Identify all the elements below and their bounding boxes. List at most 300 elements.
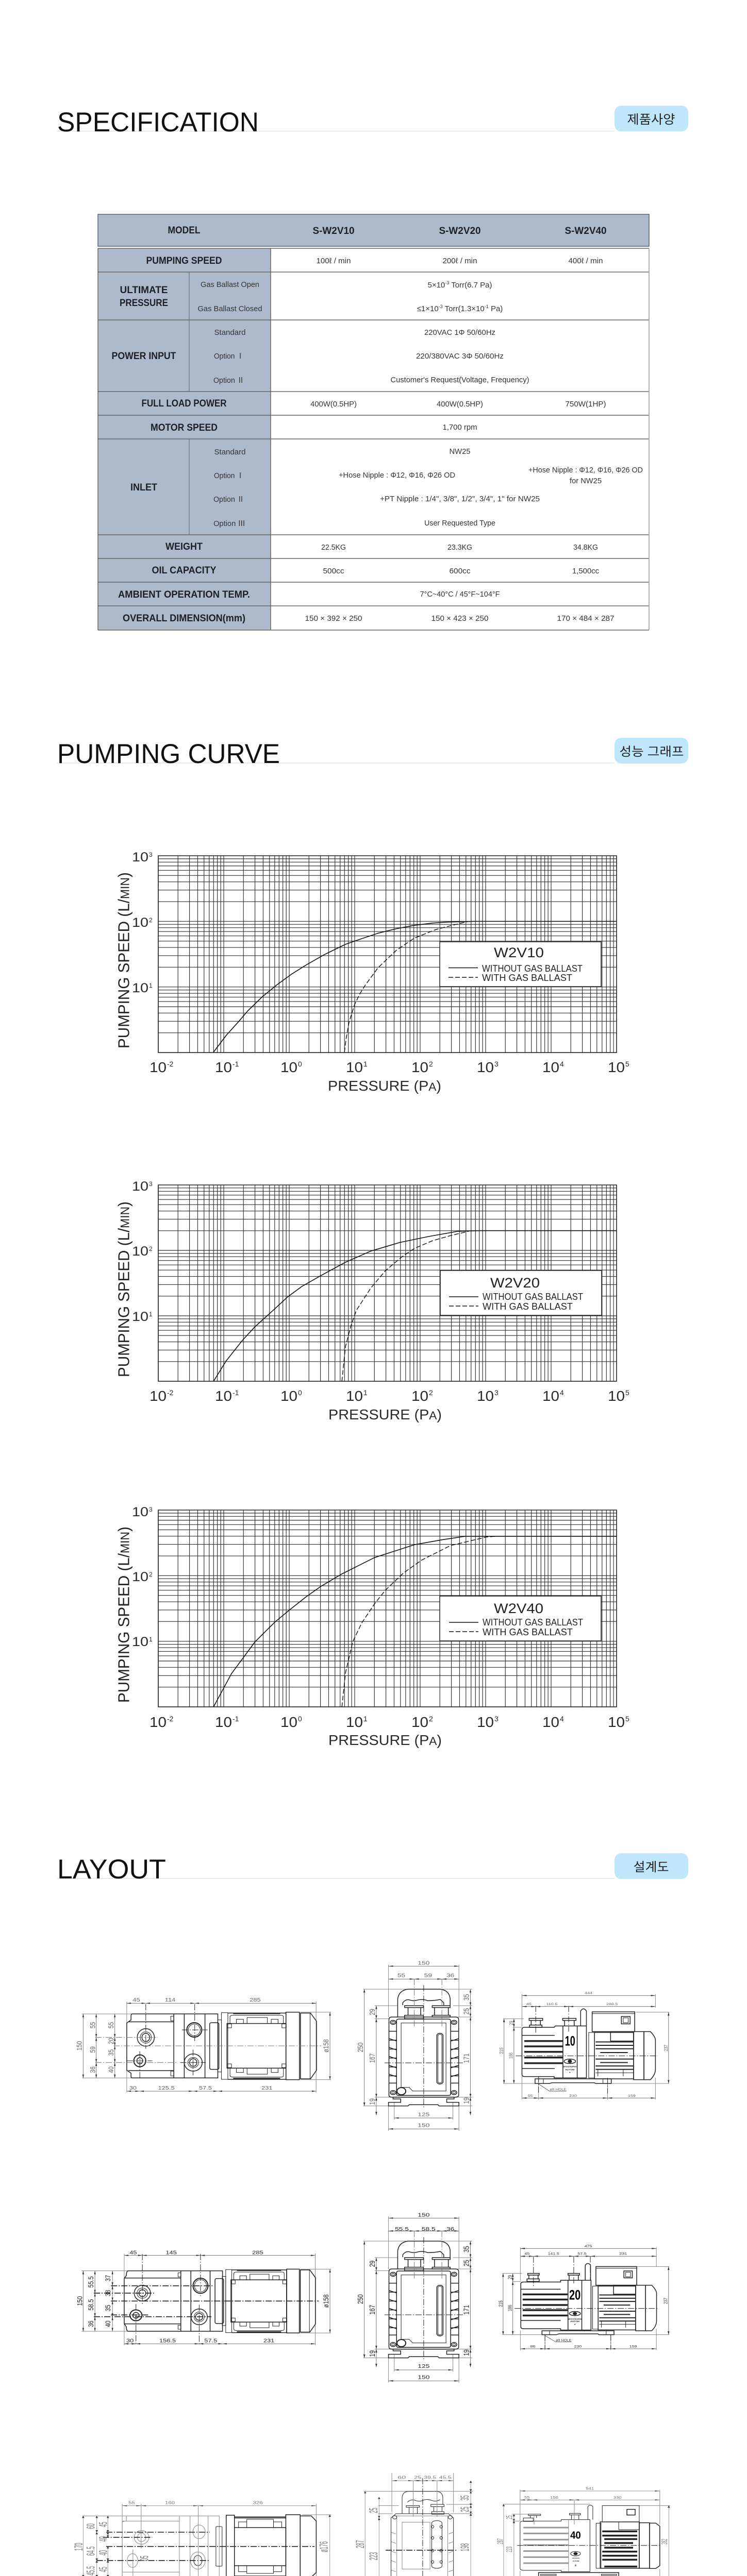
- x axis W2V40: 2: [429, 1715, 433, 1723]
- x axis W2V20: 10: [411, 1388, 428, 1404]
- drawing: W2V20 top view: 38: [104, 2290, 112, 2296]
- drawing: W2V10 top view: [75, 1997, 331, 2093]
- drawing: W2V40 top view: ø176: [318, 2541, 330, 2552]
- row: oil capacity: 1,500cc: [572, 567, 599, 575]
- legend W2V10: W2V10: [494, 945, 544, 960]
- x axis W2V20: 5: [625, 1388, 629, 1397]
- y axis W2V20: 10: [132, 1244, 148, 1259]
- x axis W2V20: 10: [346, 1388, 363, 1404]
- drawing: W2V40 front view: 60: [397, 2476, 406, 2480]
- drawing: W2V20 top view: 40: [104, 2320, 112, 2327]
- x axis W2V20: 2: [429, 1388, 433, 1397]
- row: pumping speed: 200ℓ / min: [442, 257, 477, 265]
- row: oil capacity: 600cc: [450, 567, 471, 575]
- drawing: W2V10 side view: 186: [508, 2053, 514, 2059]
- drawing: W2V10 front view: 59: [424, 1972, 432, 1978]
- legend W2V20: W2V20: [490, 1275, 540, 1291]
- drawing: W2V20 front view: 250: [356, 2294, 364, 2304]
- row: full load power: [141, 398, 606, 409]
- x axis W2V40: 4: [560, 1715, 564, 1723]
- drawing: W2V10 top view: 55: [107, 2022, 115, 2028]
- heading: specification: 제품사양: [627, 113, 675, 127]
- drawing: W2V40 front view: 25: [414, 2476, 422, 2480]
- row: model: [168, 225, 606, 236]
- drawing: W2V40 top view: 45.5: [85, 2566, 97, 2575]
- row: motor speed: 1,700 rpm: [442, 423, 477, 432]
- drawing: W2V20 front view: 167: [368, 2305, 376, 2315]
- drawing: W2V10 side view: 237: [663, 2045, 669, 2051]
- drawing: W2V20 side view: 86: [530, 2345, 536, 2348]
- row: ambient operation temp: AMBIENT OPERATION TEMP.: [118, 589, 250, 600]
- drawing: W2V40 front view: 45.5: [439, 2476, 452, 2480]
- x axis W2V10: 5: [625, 1060, 629, 1068]
- y axis W2V20: PUMPING SPEED (L/MIN): [114, 1201, 133, 1377]
- row: model: S-W2V40: [565, 226, 606, 236]
- chart: W2V20 pumping curve: [114, 1179, 629, 1422]
- row: weight: 23.3KG: [447, 543, 472, 552]
- x axis W2V40: 1: [363, 1715, 368, 1723]
- y axis W2V20: 2: [149, 1245, 153, 1252]
- drawing: W2V10 front view: 150: [418, 2122, 430, 2128]
- drawing: W2V10 top view: 231: [261, 2085, 273, 2091]
- row: power input: [111, 328, 529, 385]
- heading: layout: 설계도: [633, 1860, 669, 1874]
- legend W2V40: WITH GAS BALLAST: [483, 1627, 573, 1637]
- drawing: W2V40 front view: 25: [459, 2506, 471, 2512]
- x axis W2V10: 10: [215, 1059, 232, 1075]
- y axis W2V10: [114, 850, 153, 1048]
- drawing: W2V10 top view: 35: [107, 2049, 115, 2056]
- drawing: W2V20 top view: [75, 2249, 331, 2345]
- drawing: W2V20 top view: 156.5: [159, 2338, 176, 2344]
- x axis W2V10: 2: [429, 1060, 433, 1068]
- x axis W2V40: 10: [346, 1714, 363, 1730]
- drawing: W2V10 front view: 35: [462, 1994, 471, 2001]
- row: ultimate pressure: Gas Ballast Open: [201, 280, 259, 289]
- drawing: W2V10 front view: 25: [462, 2008, 471, 2014]
- drawing: W2V20 front view: 19: [368, 2350, 376, 2357]
- y axis W2V10: PUMPING SPEED (L/MIN): [114, 872, 133, 1048]
- drawing: W2V40 top view: 45: [97, 2567, 110, 2572]
- y axis W2V20: 1: [149, 1311, 153, 1318]
- heading: pumping curve: PUMPING CURVE: [57, 739, 280, 769]
- row: ultimate pressure: ULTIMATE: [120, 285, 168, 296]
- x axis W2V20: 1: [363, 1388, 368, 1397]
- x axis W2V10: [150, 1059, 629, 1094]
- row: overall dimension: OVERALL DIMENSION(mm): [123, 613, 245, 624]
- drawing: W2V20 top view: 150: [75, 2296, 84, 2306]
- drawing: W2V10 front view: 150: [418, 1960, 430, 1966]
- y axis W2V10: 2: [149, 917, 153, 924]
- drawing: W2V40 side view: 25: [505, 2515, 514, 2519]
- x axis W2V20: 4: [560, 1388, 564, 1397]
- drawing: W2V40 side view: 287: [495, 2538, 505, 2544]
- drawing: W2V10 top view: 114: [165, 1997, 176, 2003]
- heading: layout: LAYOUT: [57, 1854, 166, 1885]
- drawing: W2V20 front view: 19: [462, 2349, 471, 2356]
- row: inlet: Standard: [214, 448, 245, 456]
- drawing: W2V40 top view: 326: [253, 2501, 263, 2505]
- row: inlet: +Hose Nipple : Φ12, Φ16, Φ26 OD: [528, 466, 643, 474]
- row: overall dimension: [123, 613, 615, 624]
- row: inlet: for NW25: [570, 477, 602, 485]
- row: pumping speed: PUMPING SPEED: [146, 256, 222, 266]
- drawing: W2V10 side view: 45: [526, 2002, 532, 2006]
- y axis W2V20: [114, 1179, 153, 1377]
- drawing: W2V20 side view: 57.5: [577, 2252, 587, 2256]
- y axis W2V20: 3: [149, 1180, 153, 1188]
- drawing: W2V40 front view: 223: [368, 2552, 380, 2560]
- y axis W2V40: PUMPING SPEED (L/MIN): [114, 1527, 133, 1703]
- curves W2V10: [213, 921, 617, 1052]
- row: model: S-W2V10: [312, 226, 355, 236]
- drawing: W2V10 side view: ø9 HOLE: [550, 2088, 567, 2091]
- heading: layout: [57, 1853, 688, 1885]
- drawing: W2V20 side view: 475: [585, 2244, 592, 2248]
- x axis W2V10: 10: [346, 1059, 363, 1075]
- drawing: W2V10 side view: AUTOM: [565, 2069, 575, 2071]
- row: weight: [165, 541, 598, 552]
- drawing: W2V20 side view: 45: [524, 2252, 530, 2256]
- row: inlet: INLET: [130, 482, 157, 493]
- drawing: W2V40 side view: 156: [550, 2495, 558, 2500]
- drawing: W2V40 side view: 330: [613, 2495, 622, 2500]
- row: ambient operation temp: 7°C~40°C / 45°F~104°F: [420, 590, 500, 599]
- drawing: W2V40 front view: 287: [354, 2540, 367, 2548]
- drawing: W2V10 side view: 110.5: [546, 2002, 558, 2006]
- drawing: W2V40 side view: 223: [505, 2547, 514, 2552]
- row: ultimate pressure: -1: [485, 304, 489, 309]
- x axis W2V20: 10: [477, 1388, 494, 1404]
- x axis W2V40: 10: [411, 1714, 428, 1730]
- drawing: W2V10 top view: 30: [129, 2085, 137, 2091]
- drawing: W2V20 side view: AUTOM: [570, 2320, 580, 2323]
- drawing: W2V40 side view: AUTOM: [573, 2561, 579, 2562]
- drawing: W2V40 top view: [72, 2501, 331, 2576]
- x axis W2V20: 10: [542, 1388, 559, 1404]
- drawing: W2V20 front view: 29: [368, 2261, 376, 2267]
- drawing: W2V40 front view: 25: [368, 2507, 380, 2513]
- x axis W2V40: PRESSURE (PA): [328, 1732, 442, 1748]
- x axis W2V20: PRESSURE (PA): [328, 1406, 442, 1422]
- drawing: W2V10 front view: 19: [368, 2098, 376, 2105]
- drawing: W2V20 front view: 150: [418, 2374, 430, 2380]
- drawing: W2V10 top view: 36: [88, 2066, 97, 2073]
- x axis W2V40: 0: [298, 1715, 302, 1723]
- row: ambient operation temp: [118, 589, 500, 600]
- row: inlet: NW25: [450, 447, 470, 456]
- drawing: W2V10 side view: 159: [628, 2094, 636, 2098]
- drawing: W2V40 top view: 05: [138, 2555, 151, 2561]
- x axis W2V20: 10: [215, 1388, 232, 1404]
- x axis W2V20: -2: [167, 1388, 174, 1397]
- drawing: W2V10 side view: 215: [499, 2047, 504, 2054]
- row: inlet: +Hose Nipple : Φ12, Φ16, Φ26 OD: [339, 471, 455, 480]
- drawing: W2V20 side view: ø9 HOLE: [556, 2338, 571, 2342]
- y axis W2V10: 10: [132, 850, 148, 865]
- x axis W2V40: 3: [494, 1715, 499, 1723]
- row: ultimate pressure: Torr(1.3×10: [443, 304, 485, 313]
- legend W2V10: WITH GAS BALLAST: [482, 973, 572, 983]
- drawing: W2V20 top view: 231: [263, 2338, 274, 2344]
- x axis W2V10: -2: [167, 1060, 174, 1068]
- drawing: W2V20 front view: 150: [418, 2212, 430, 2218]
- drawing: W2V40 top view: 60: [85, 2523, 97, 2529]
- row: motor speed: [151, 422, 477, 433]
- row: ultimate pressure: -3: [439, 304, 443, 309]
- y axis W2V10: 10: [132, 981, 148, 995]
- row: pumping speed: 100ℓ / min: [317, 257, 351, 265]
- row: inlet: User Requested Type: [424, 519, 495, 528]
- row: motor speed: MOTOR SPEED: [151, 422, 218, 433]
- x axis W2V20: [150, 1388, 629, 1422]
- legend W2V10: [440, 942, 601, 987]
- legend W2V20: [440, 1270, 602, 1315]
- drawing: W2V40 front view: [354, 2473, 473, 2576]
- drawing: W2V40 side view: 40: [570, 2529, 581, 2541]
- row: power input: Option Ⅱ: [213, 376, 244, 385]
- row: ultimate pressure: [120, 280, 503, 313]
- legend W2V40: W2V40: [494, 1601, 543, 1616]
- drawing: W2V20 side view: 231: [619, 2252, 627, 2256]
- drawing: W2V40 front view: 198: [459, 2544, 471, 2551]
- drawing: W2V20 front view: 125: [418, 2363, 430, 2369]
- x axis W2V10: 10: [542, 1059, 559, 1075]
- x axis W2V10: 1: [363, 1060, 368, 1068]
- x axis W2V10: 4: [560, 1060, 564, 1068]
- row: power input: POWER INPUT: [111, 351, 176, 362]
- row: full load power: 400W(0.5HP): [437, 400, 483, 409]
- drawing: W2V10 front view: 36: [446, 1972, 455, 1978]
- drawing: W2V20 side view: 20: [569, 2287, 580, 2302]
- drawing: W2V10 side view: WOOSUNG: [563, 2065, 577, 2067]
- x axis W2V10: -1: [233, 1060, 239, 1068]
- row: ultimate pressure: ≤1×10: [417, 304, 439, 313]
- drawing: W2V20 top view: 35: [104, 2305, 112, 2311]
- drawing: W2V40 side view: 282: [660, 2539, 669, 2545]
- drawing: W2V10 top view: 57.5: [199, 2085, 212, 2091]
- x axis W2V10: PRESSURE (PA): [328, 1078, 441, 1094]
- x axis W2V40: 10: [150, 1714, 167, 1730]
- x axis W2V40: 5: [625, 1715, 629, 1723]
- drawing: W2V10 front view: 19: [462, 2097, 471, 2104]
- drawing: W2V10 top view: 40: [107, 2066, 115, 2073]
- x axis W2V10: 10: [280, 1059, 297, 1075]
- row: inlet: Option Ⅰ: [214, 471, 244, 480]
- drawing: W2V10 top view: 125.5: [158, 2085, 175, 2091]
- drawing: W2V10 top view: 150: [75, 2041, 84, 2050]
- row: power input: 220VAC 1Φ 50/60Hz: [424, 328, 495, 337]
- chart: W2V40 pumping curve: [114, 1505, 629, 1748]
- drawing: W2V10 front view: 125: [418, 2111, 430, 2117]
- row: oil capacity: 500cc: [323, 567, 344, 575]
- curves W2V20: [213, 1231, 617, 1381]
- x axis W2V10: 0: [298, 1060, 302, 1068]
- y axis W2V10: 3: [149, 851, 153, 858]
- x axis W2V40: 10: [542, 1714, 559, 1730]
- row: full load power: 400W(0.5HP): [310, 400, 357, 409]
- row: ultimate pressure: Pa): [489, 304, 503, 313]
- drawing: W2V20 front view: [356, 2212, 472, 2383]
- x axis W2V40: 10: [608, 1714, 625, 1730]
- row: pumping speed: 400ℓ / min: [568, 257, 603, 265]
- drawing: W2V20 top view: 30: [126, 2338, 134, 2344]
- drawing: W2V10 front view: [356, 1960, 472, 2131]
- drawing: W2V10 top view: 285: [250, 1997, 261, 2003]
- drawing: W2V10 front view: 250: [356, 2043, 364, 2052]
- drawing: W2V40 top view: 55: [128, 2501, 135, 2505]
- row: power input: 220/380VAC 3Φ 50/60Hz: [416, 352, 504, 361]
- row: inlet: [130, 447, 643, 528]
- drawing: W2V10 side view: 55: [528, 2094, 533, 2098]
- heading: specification: [57, 106, 688, 138]
- drawing: W2V20 top view: 45: [129, 2249, 137, 2256]
- drawing: W2V10 top view: 55: [88, 2022, 97, 2028]
- row: ultimate pressure: Gas Ballast Closed: [198, 304, 262, 313]
- drawing: W2V20 top view: 37: [104, 2275, 112, 2281]
- row: inlet: Option Ⅱ: [213, 495, 244, 504]
- y axis W2V40: [114, 1505, 153, 1703]
- row: full load power: 750W(1HP): [565, 400, 606, 409]
- drawing: W2V40 top view: 40: [97, 2536, 110, 2542]
- x axis W2V10: 3: [494, 1060, 499, 1068]
- drawing: W2V20 side view: 186: [507, 2305, 513, 2311]
- drawing: W2V10 side view: 29: [508, 2021, 514, 2025]
- y axis W2V40: 1: [149, 1636, 153, 1643]
- row: overall dimension: 150 × 423 × 250: [431, 614, 489, 623]
- x axis W2V40: 10: [280, 1714, 297, 1730]
- x axis W2V10: 10: [411, 1059, 428, 1075]
- row: weight: 22.5KG: [321, 543, 346, 552]
- drawing: W2V40 side view: WOOSUNG: [572, 2557, 579, 2559]
- x axis W2V40: -2: [167, 1715, 174, 1723]
- drawing: W2V10 top view: 45: [132, 1997, 140, 2003]
- drawing: W2V20 top view: 57.5: [204, 2338, 217, 2344]
- drawing: W2V40 top view: 160: [165, 2501, 175, 2505]
- row: power input: Standard: [214, 328, 245, 337]
- x axis W2V10: 10: [608, 1059, 625, 1075]
- row: ultimate pressure: PRESSURE: [120, 298, 168, 309]
- drawing: W2V10 side view: 444: [585, 1991, 593, 1995]
- legend W2V40: WITHOUT GAS BALLAST: [483, 1617, 583, 1628]
- drawing: W2V20 top view: 145: [165, 2249, 177, 2256]
- y axis W2V10: 10: [132, 916, 148, 930]
- x axis W2V20: 0: [298, 1388, 302, 1397]
- drawing: W2V10 front view: 167: [368, 2054, 376, 2063]
- drawing: W2V10 side view: 10: [565, 2033, 575, 2049]
- row: oil capacity: OIL CAPACITY: [152, 565, 217, 576]
- drawing: W2V20 side view: 237: [663, 2298, 669, 2304]
- drawing: W2V40 side view: 55: [524, 2495, 530, 2500]
- drawing: W2V20 top view: 285: [252, 2249, 263, 2256]
- y axis W2V20: 10: [132, 1179, 148, 1194]
- legend W2V10: WITHOUT GAS BALLAST: [482, 963, 583, 974]
- drawing: W2V20 side view: 141.5: [547, 2252, 559, 2256]
- x axis W2V40: 10: [477, 1714, 494, 1730]
- legend W2V20: WITH GAS BALLAST: [483, 1301, 573, 1312]
- drawing: W2V20 side view: 159: [629, 2345, 637, 2348]
- drawing: W2V10 side view: [499, 1991, 669, 2099]
- drawing: W2V20 top view: 55.5: [87, 2276, 95, 2287]
- drawing: W2V20 front view: 36: [446, 2226, 455, 2232]
- drawing: W2V40 front view: 35: [459, 2495, 471, 2501]
- x axis W2V40: [150, 1714, 629, 1748]
- x axis W2V10: 10: [477, 1059, 494, 1075]
- drawing: W2V40 side view: [495, 2486, 670, 2576]
- row: overall dimension: 150 × 392 × 250: [305, 614, 362, 623]
- x axis W2V10: 10: [150, 1059, 167, 1075]
- row: overall dimension: 170 × 484 × 287: [557, 614, 615, 623]
- drawing: W2V10 top view: 20: [107, 2038, 115, 2044]
- heading: pumping curve: 성능 그래프: [620, 745, 684, 759]
- heading: pumping curve: [57, 738, 688, 769]
- drawing: W2V20 side view: 29: [507, 2275, 513, 2279]
- row: full load power: FULL LOAD POWER: [141, 398, 227, 409]
- legend W2V20: WITHOUT GAS BALLAST: [483, 1292, 583, 1302]
- heading: specification: SPECIFICATION: [57, 107, 259, 138]
- row: ultimate pressure: Torr(6.7 Pa): [449, 281, 492, 290]
- x axis W2V20: 3: [494, 1388, 499, 1397]
- row: ultimate pressure: -3: [445, 280, 449, 285]
- drawing: W2V40 side view: 541: [586, 2486, 594, 2490]
- drawing: W2V20 top view: 36: [87, 2320, 95, 2327]
- drawing: W2V10 front view: 171: [462, 2054, 471, 2063]
- row: inlet: +PT Nipple : 1/4", 3/8", 1/2", 3/4", 1" for NW25: [380, 495, 540, 503]
- drawing: W2V20 side view: [497, 2244, 669, 2350]
- drawing: W2V40 top view: 45: [97, 2522, 110, 2527]
- drawing: W2V20 front view: 25: [462, 2260, 471, 2266]
- drawing: W2V10 side view: 230: [569, 2094, 577, 2098]
- y axis W2V40: 10: [132, 1505, 148, 1519]
- curves W2V40: [213, 1536, 617, 1707]
- row: weight: WEIGHT: [165, 541, 203, 552]
- drawing: W2V10 side view: 288.5: [606, 2002, 618, 2006]
- x axis W2V20: -1: [233, 1388, 239, 1397]
- y axis W2V40: 2: [149, 1571, 153, 1578]
- x axis W2V20: 10: [150, 1388, 167, 1404]
- drawing: W2V20 side view: 215: [497, 2300, 504, 2307]
- drawing: W2V40 top view: 40: [97, 2550, 110, 2555]
- y axis W2V20: 10: [132, 1310, 148, 1324]
- y axis W2V10: 1: [149, 982, 153, 989]
- drawing: W2V20 side view: 230: [574, 2345, 582, 2348]
- y axis W2V40: 3: [149, 1506, 153, 1513]
- y axis W2V40: 10: [132, 1570, 148, 1584]
- drawing: W2V40 front view: 39.5: [424, 2476, 436, 2480]
- drawing: W2V20 front view: 58.5: [422, 2226, 436, 2232]
- drawing: W2V20 front view: 171: [462, 2305, 471, 2315]
- drawing: W2V20 top view: ø158: [322, 2294, 330, 2308]
- specification table: [98, 214, 649, 630]
- legend W2V40: [440, 1596, 601, 1641]
- x axis W2V20: 10: [608, 1388, 625, 1404]
- row: power input: Customer's Request(Voltage, Frequency): [391, 376, 529, 384]
- drawing: W2V10 top view: ø158: [322, 2039, 330, 2053]
- row: pumping speed: [146, 256, 603, 266]
- chart: W2V10 pumping curve: [114, 850, 629, 1094]
- row: power input: Option Ⅰ: [214, 352, 244, 361]
- drawing: W2V20 side view: WOOSUNG: [568, 2318, 582, 2320]
- row: inlet: Option Ⅲ: [213, 519, 245, 528]
- row: oil capacity: [152, 565, 599, 576]
- row: weight: 34.8KG: [573, 543, 598, 552]
- drawing: W2V20 front view: 55.5: [395, 2226, 409, 2232]
- drawing: W2V10 front view: 29: [368, 2009, 376, 2015]
- drawing: W2V10 front view: 55: [397, 1972, 405, 1978]
- row: ultimate pressure: 5×10: [428, 281, 445, 290]
- row: model: MODEL: [168, 225, 201, 236]
- drawing: W2V20 front view: 35: [462, 2246, 471, 2252]
